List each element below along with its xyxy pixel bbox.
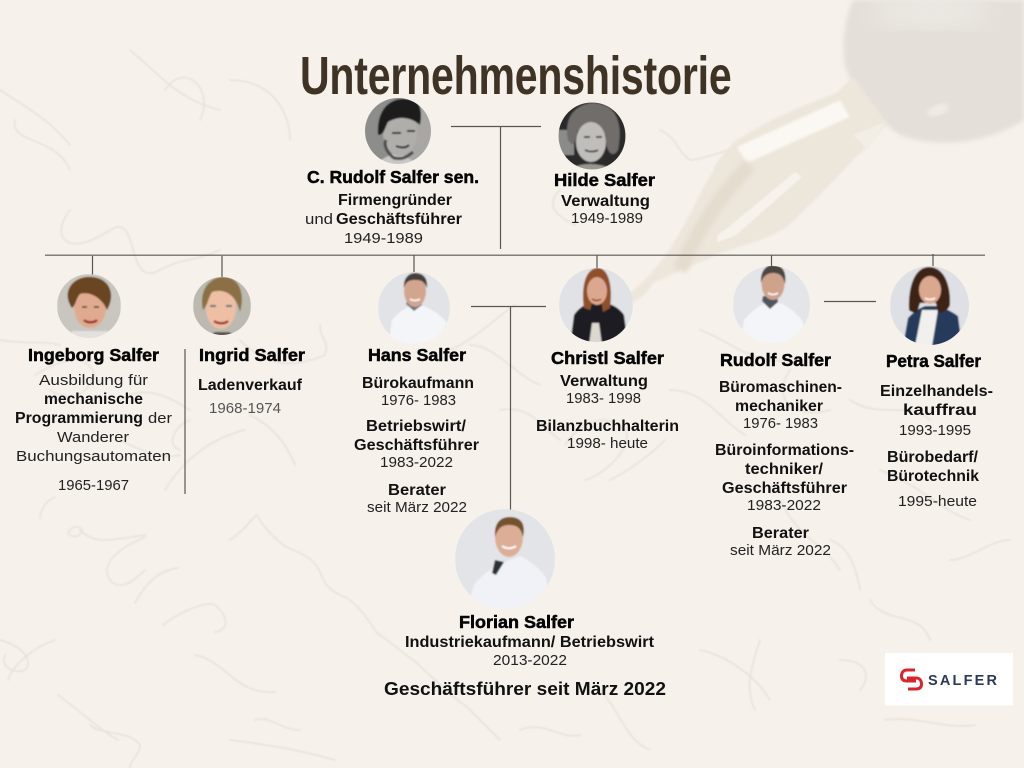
- person: Rudolf Salfer: Büroinformations-: [715, 442, 854, 459]
- person: Ingeborg Salfer: mechanische: [44, 391, 143, 408]
- person: Petra Salfer: Bürobedarf/: [887, 449, 979, 466]
- person: Christl Salfer: Verwaltung: [560, 373, 648, 390]
- person: C. Rudolf Salfer sen.: Geschäftsführer: [336, 211, 462, 228]
- person: Rudolf Salfer: Büromaschinen-: [719, 379, 842, 396]
- person: Hans Salfer: Hans Salfer: [368, 345, 466, 365]
- icon: logo mark: [902, 670, 922, 689]
- person: Petra Salfer: kauffrau: [903, 402, 977, 419]
- person: Petra Salfer: [880, 266, 993, 510]
- person: C. Rudolf Salfer sen.: und: [305, 211, 333, 228]
- photo: Florian Salfer: [455, 509, 555, 612]
- person: Hilde Salfer: 1949-1989: [571, 210, 643, 227]
- person: Ingrid Salfer: Ladenverkauf: [198, 377, 303, 394]
- person: Hans Salfer: Betriebswirt/: [366, 418, 467, 435]
- photo: C. Rudolf Salfer sen.: [364, 97, 433, 166]
- background: fountain pen nib: [630, 0, 1024, 303]
- person: Rudolf Salfer: Berater: [752, 525, 809, 542]
- photo: Ingrid Salfer: [193, 277, 251, 338]
- person: Petra Salfer: Petra Salfer: [886, 351, 981, 371]
- person: Hans Salfer: Geschäftsführer: [354, 437, 479, 454]
- person: Ingeborg Salfer: Buchungsautomaten: [16, 448, 171, 465]
- person: Ingrid Salfer: [193, 277, 305, 417]
- photo: Rudolf Salfer: [733, 265, 811, 345]
- person: Ingeborg Salfer: Ausbildung für: [39, 372, 148, 389]
- person: Ingeborg Salfer: Programmierung: [15, 410, 143, 427]
- person: C. Rudolf Salfer sen.: [305, 97, 479, 247]
- person: Christl Salfer: [536, 268, 679, 452]
- person: Hans Salfer: Berater: [388, 482, 446, 499]
- person: Florian Salfer: [384, 509, 666, 699]
- person: Florian Salfer: Industriekaufmann/ Betriebswirt: [405, 634, 654, 651]
- person: Christl Salfer: Bilanzbuchhalterin: [536, 418, 679, 435]
- person: C. Rudolf Salfer sen.: C. Rudolf Salfer sen.: [307, 167, 479, 187]
- person: C. Rudolf Salfer sen.: 1949-1989: [344, 230, 423, 247]
- person: Ingeborg Salfer: der: [148, 410, 172, 427]
- person: Petra Salfer: Einzelhandels-: [880, 383, 993, 400]
- person: Florian Salfer: Florian Salfer: [459, 612, 574, 632]
- person: Rudolf Salfer: seit März 2022: [730, 542, 831, 559]
- person: Rudolf Salfer: Geschäftsführer: [722, 480, 847, 497]
- person: Christl Salfer: 1983- 1998: [566, 390, 641, 407]
- photo: Christl Salfer: [559, 268, 633, 345]
- person: Hilde Salfer: [554, 102, 655, 227]
- person: Florian Salfer: Geschäftsführer seit März 2022: [384, 678, 666, 699]
- logo: SALFER: [885, 653, 1013, 706]
- logo: SALFER: SALFER: [928, 673, 998, 689]
- person: Ingrid Salfer: Ingrid Salfer: [199, 345, 305, 365]
- person: Hans Salfer: 1976- 1983: [381, 392, 456, 409]
- photo: Hilde Salfer: [558, 102, 626, 170]
- person: Hans Salfer: 1983-2022: [380, 454, 453, 471]
- person: Ingeborg Salfer: [15, 274, 172, 494]
- person: Hans Salfer: seit März 2022: [367, 499, 467, 516]
- person: Ingeborg Salfer: Ingeborg Salfer: [28, 345, 159, 365]
- person: Christl Salfer: 1998- heute: [567, 435, 648, 452]
- person: Petra Salfer: 1993-1995: [899, 422, 971, 439]
- person: Christl Salfer: Christl Salfer: [551, 348, 664, 368]
- person: C. Rudolf Salfer sen.: Firmengründer: [338, 192, 452, 209]
- person: Ingeborg Salfer: Wanderer: [57, 429, 129, 446]
- person: Rudolf Salfer: techniker/: [745, 461, 824, 478]
- person: Ingeborg Salfer: 1965-1967: [58, 477, 129, 494]
- person: Petra Salfer: Bürotechnik: [887, 468, 979, 485]
- person: Hans Salfer: Bürokaufmann: [362, 375, 474, 392]
- person: Rudolf Salfer: Rudolf Salfer: [720, 350, 831, 370]
- person: Hans Salfer: [354, 272, 479, 516]
- photo: Ingeborg Salfer: [57, 274, 121, 345]
- photo: Petra Salfer: [890, 266, 970, 346]
- person: Rudolf Salfer: mechaniker: [735, 398, 823, 415]
- person: Hilde Salfer: Verwaltung: [561, 193, 650, 210]
- person: Petra Salfer: 1995-heute: [898, 493, 977, 510]
- person: Rudolf Salfer: 1976- 1983: [743, 415, 818, 432]
- photo: Hans Salfer: [378, 272, 450, 346]
- connector lines: family tree: [45, 126, 985, 510]
- person: Florian Salfer: 2013-2022: [493, 652, 567, 669]
- person: Rudolf Salfer: [715, 265, 854, 559]
- person: Rudolf Salfer: 1983-2022: [747, 497, 821, 514]
- title: Unternehmenshistorie: [300, 47, 732, 106]
- person: Hilde Salfer: Hilde Salfer: [554, 170, 655, 190]
- person: Ingrid Salfer: 1968-1974: [209, 400, 281, 417]
